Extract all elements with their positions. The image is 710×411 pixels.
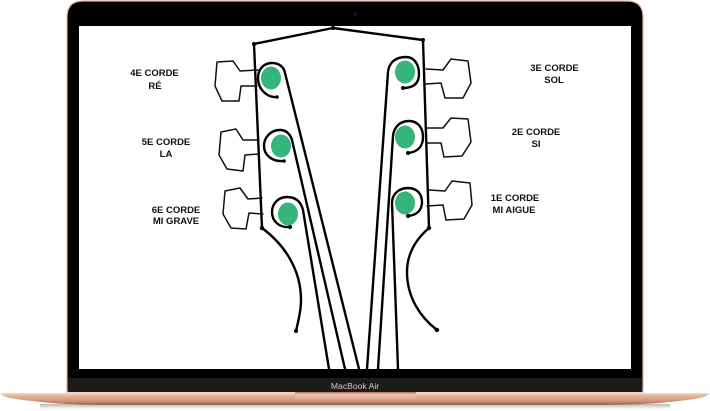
labels: right strings (491, 63, 579, 216)
strings (258, 57, 423, 369)
peg: 5e corde (219, 129, 259, 171)
label: 1e corde: MI AIGUE (493, 205, 535, 216)
string 4 re (258, 63, 359, 369)
marker: 4e corde (261, 66, 281, 90)
marker: 1e corde (395, 192, 415, 214)
string 6 mi grave (272, 197, 329, 369)
tuning pegs (215, 59, 472, 229)
camera (353, 12, 357, 16)
brand label: MacBook Air (331, 381, 379, 391)
peg: 4e corde (215, 61, 258, 101)
base shadow (40, 404, 670, 409)
label: 5e corde: 5E CORDE (142, 137, 190, 148)
string 2 si (378, 121, 423, 369)
screen (79, 26, 631, 369)
base notch (295, 392, 416, 399)
diagram: guitar headstock (215, 26, 472, 369)
labels: left strings (130, 68, 200, 227)
label: 5e corde: LA (160, 149, 172, 160)
laptop lid (67, 1, 643, 392)
string 5 la (264, 130, 345, 369)
marker: 3e corde (395, 60, 415, 84)
label: 3e corde: SOL (544, 75, 564, 86)
headstock outline (254, 28, 437, 331)
marker: 6e corde (278, 202, 298, 226)
label: 2e corde: SI (532, 139, 540, 150)
label: 3e corde: 3E CORDE (530, 63, 579, 74)
label: 1e corde: 1E CORDE (491, 193, 539, 204)
green markers (261, 60, 415, 226)
string 3 sol (367, 57, 419, 369)
label: 4e corde: RÉ (148, 81, 162, 92)
laptop base (1, 393, 709, 405)
outline joints (252, 26, 439, 333)
label: 6e corde: MI GRAVE (153, 216, 199, 227)
bottom bezel band (68, 378, 642, 392)
string 1 mi aigue (392, 188, 422, 369)
marker: 2e corde (395, 126, 415, 148)
peg: 3e corde (426, 59, 471, 98)
peg: 2e corde (426, 118, 471, 157)
label: 4e corde: 4E CORDE (130, 68, 179, 79)
label: 6e corde: 6E CORDE (152, 205, 200, 216)
marker: 5e corde (271, 134, 291, 158)
peg: 1e corde (427, 181, 472, 220)
peg: 6e corde (223, 188, 263, 229)
label: 2e corde: 2E CORDE (512, 127, 560, 138)
